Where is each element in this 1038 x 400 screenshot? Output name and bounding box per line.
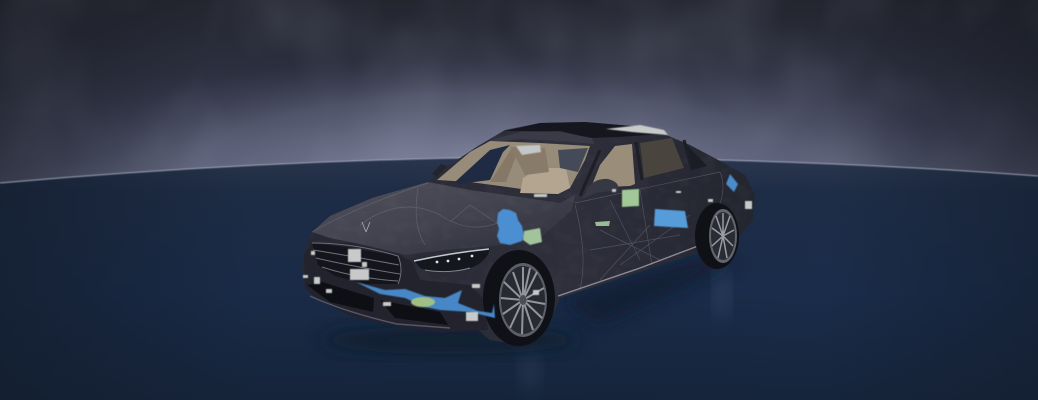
car shadow and reflection (320, 258, 740, 392)
rear quarter window (686, 144, 707, 170)
blue sensor: front fender module (497, 209, 524, 245)
hood (312, 182, 575, 255)
roof frame (490, 132, 594, 144)
lower intake (307, 282, 448, 325)
hood star (362, 222, 370, 232)
blue sensor: door battery (654, 209, 688, 228)
green sensor: fender module (523, 228, 542, 245)
bumper chrome line (310, 296, 450, 328)
green sensor: door upper (622, 189, 639, 207)
front seats (510, 147, 588, 194)
windscreen (437, 141, 590, 194)
horizon rim light (0, 157, 1038, 183)
windscreen left dark glass (455, 145, 510, 184)
blue sensor: rear quarter (726, 174, 738, 192)
window pillars (580, 140, 692, 196)
stage floor (0, 157, 1038, 400)
rear wheel (695, 203, 739, 269)
green-yellow sensor on wiring (411, 297, 435, 307)
side mirror (582, 179, 618, 199)
front wheel (483, 250, 555, 346)
green sensor: door small (595, 221, 610, 226)
headlight (414, 248, 490, 272)
white sensor blocks (303, 125, 752, 321)
body grain (300, 120, 760, 350)
sill highlight (558, 246, 698, 296)
front fascia (304, 243, 488, 332)
hood seam highlights (312, 172, 723, 290)
grille (312, 243, 402, 284)
front door window (588, 144, 635, 195)
background: misty sky (0, 0, 1038, 200)
rear-view mirror sensor (516, 145, 541, 155)
blue wiring front (356, 282, 495, 318)
rear door window (640, 138, 684, 178)
car body silhouette (302, 122, 755, 345)
roof (505, 122, 664, 138)
left mirror (432, 164, 447, 177)
car (300, 120, 760, 350)
